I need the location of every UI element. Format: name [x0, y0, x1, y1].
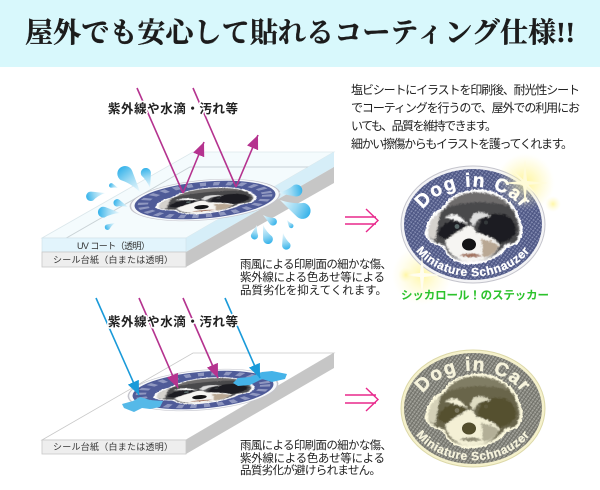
intro text block: [351, 82, 580, 151]
backing sheet layer: [42, 252, 186, 267]
flattened sticker: [127, 364, 279, 416]
title band: [0, 0, 600, 67]
slab top surface: [42, 152, 334, 238]
slab top surface: [42, 353, 334, 440]
diagram: uncoated sticker slab: [42, 298, 334, 454]
backing sheet layer: [42, 440, 186, 454]
caption: uncoated: [240, 438, 392, 477]
sticker lettering: [414, 356, 530, 460]
heading: UV and water: 紫外線や水滴・汚れ等: [108, 101, 238, 116]
intro text block: 細かい擦傷からもイラストを護ってくれます。: [351, 136, 573, 151]
flattened sticker: [129, 174, 281, 226]
arrow: coated result: [345, 209, 378, 232]
caption: coated: 紫外線による色あせ等による: [240, 270, 385, 284]
caption: coated: [240, 257, 392, 297]
caption: coated: 品質劣化を抑えてくれます。: [240, 283, 387, 297]
green sticker caption: シッカロール！のステッカー: [401, 289, 549, 302]
heading: UV and water: 紫外線や水滴・汚れ等: [108, 314, 238, 329]
water splash left: [122, 397, 163, 412]
water droplets right: [250, 184, 313, 251]
UV coat layer: UV コート（透明）: [77, 241, 150, 251]
water splash right: [233, 371, 287, 386]
caption: uncoated: 雨風による印刷面の細かな傷、: [240, 438, 392, 452]
arrow: uncoated result: [345, 388, 378, 411]
caption: uncoated: 紫外線による色あせ等による: [240, 451, 385, 465]
incoming arrows: [96, 298, 260, 395]
sticker: uncoated faded: [400, 350, 546, 468]
intro text block: 塩ビシートにイラストを印刷後、耐光性シート: [351, 82, 580, 97]
intro text block: でコーティングを行うので、屋外での利用にお: [351, 101, 580, 115]
water droplets left: [85, 163, 155, 231]
backing sheet layer: シール台紙（白または透明）: [53, 254, 173, 265]
title: 屋外でも安心して貼れるコーティング仕様!!: [25, 17, 575, 49]
sticker lettering: Miniature Schnauzer: [416, 430, 528, 460]
UV coat layer: [42, 238, 186, 252]
intro text block: いても、品質を維持できます。: [351, 118, 497, 133]
sparkle glow behind sticker: [392, 153, 555, 305]
diagram: coated sticker slab: [42, 88, 334, 267]
caption: uncoated: 品質劣化が避けられません。: [240, 463, 381, 477]
slab right side: [186, 152, 334, 267]
caption: coated: 雨風による印刷面の細かな傷、: [240, 257, 392, 271]
faded dog face: [425, 373, 523, 448]
sticker lettering: Dog in Car: [414, 356, 530, 392]
sticker: coated: [401, 166, 545, 283]
backing sheet layer: シール台紙（白または透明）: [53, 441, 173, 452]
incoming and reflected arrows: [137, 88, 258, 193]
sparkles: [398, 155, 561, 295]
slab right side: [186, 353, 334, 454]
